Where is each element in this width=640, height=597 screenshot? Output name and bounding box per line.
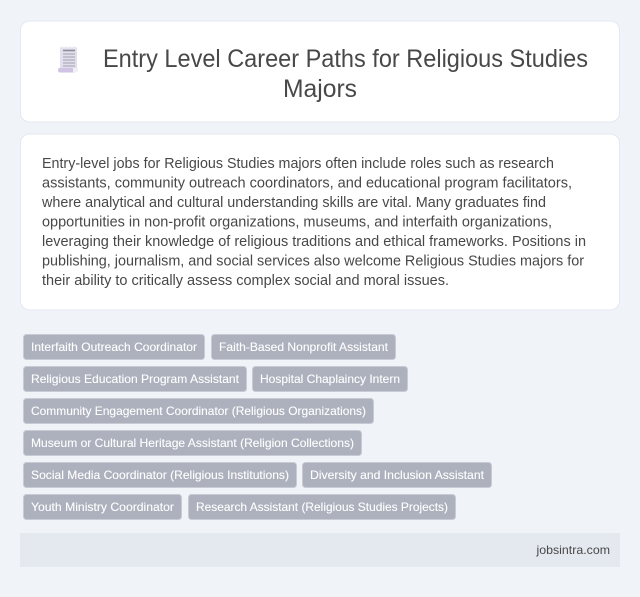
tag: Youth Ministry Coordinator — [24, 494, 182, 520]
tag: Museum or Cultural Heritage Assistant (Religion Collections) — [24, 430, 362, 456]
tag: Community Engagement Coordinator (Religious Organizations) — [24, 398, 374, 424]
text block: description paragraph: their ability to critically assess complex social and moral issues. — [42, 273, 449, 289]
tag: Interfaith Outreach Coordinator — [24, 334, 204, 360]
title: Entry Level Career Paths for Religious Studies — [103, 45, 588, 73]
tag: Research Assistant (Religious Studies Projects) — [188, 494, 456, 520]
text block: description paragraph: opportunities in non-profit organizations, museums, and interfaith organizations, — [42, 214, 552, 230]
panel: description — [20, 134, 620, 310]
tag: Youth Ministry Coordinator: Youth Ministry Coordinator — [31, 500, 174, 514]
tag: Diversity and Inclusion Assistant — [302, 462, 492, 488]
title — [103, 45, 588, 103]
text block: description paragraph: publishing, journalism, and social services also welcome Religious Studies majors for — [42, 254, 584, 270]
text block: description paragraph: where analytical and cultural understanding skills are vital. Many graduates find — [41, 195, 546, 211]
footer text: jobsintra.com: jobsintra.com — [535, 543, 610, 557]
icon: scroll document — [58, 46, 78, 72]
tag: Hospital Chaplaincy Intern: Hospital Chaplaincy Intern — [260, 372, 400, 386]
tag: Social Media Coordinator (Religious Institutions): Social Media Coordinator (Religious Institutions) — [31, 468, 289, 482]
tag: Hospital Chaplaincy Intern — [252, 366, 408, 392]
tag: Faith-Based Nonprofit Assistant — [212, 334, 396, 360]
tag: Interfaith Outreach Coordinator: Interfaith Outreach Coordinator — [31, 340, 197, 354]
text block: description paragraph: assistants, community outreach coordinators, and educational program facilitators, — [42, 176, 572, 192]
tag: Religious Education Program Assistant: Religious Education Program Assistant — [31, 372, 240, 386]
panel: header card — [20, 21, 620, 122]
title: Majors — [283, 75, 357, 103]
text block: description paragraph: Entry-level jobs for Religious Studies majors often include roles such as research — [42, 156, 554, 172]
tag: Diversity and Inclusion Assistant: Diversity and Inclusion Assistant — [310, 468, 485, 482]
text block: description paragraph — [41, 156, 586, 289]
tag: Research Assistant (Religious Studies Projects): Research Assistant (Religious Studies Projects) — [196, 500, 448, 514]
tag: Social Media Coordinator (Religious Institutions) — [24, 462, 296, 488]
tag: Religious Education Program Assistant — [24, 366, 246, 392]
text block: description paragraph: leveraging their knowledge of religious traditions and ethical frameworks. Positions in — [42, 234, 586, 250]
tag: Faith-Based Nonprofit Assistant: Faith-Based Nonprofit Assistant — [219, 340, 389, 354]
footer — [20, 533, 620, 567]
tag: Museum or Cultural Heritage Assistant (Religion Collections): Museum or Cultural Heritage Assistant (Religion Collections) — [31, 436, 354, 450]
panel: career tags — [24, 334, 492, 520]
tag: Community Engagement Coordinator (Religious Organizations): Community Engagement Coordinator (Religious Organizations) — [31, 404, 366, 418]
